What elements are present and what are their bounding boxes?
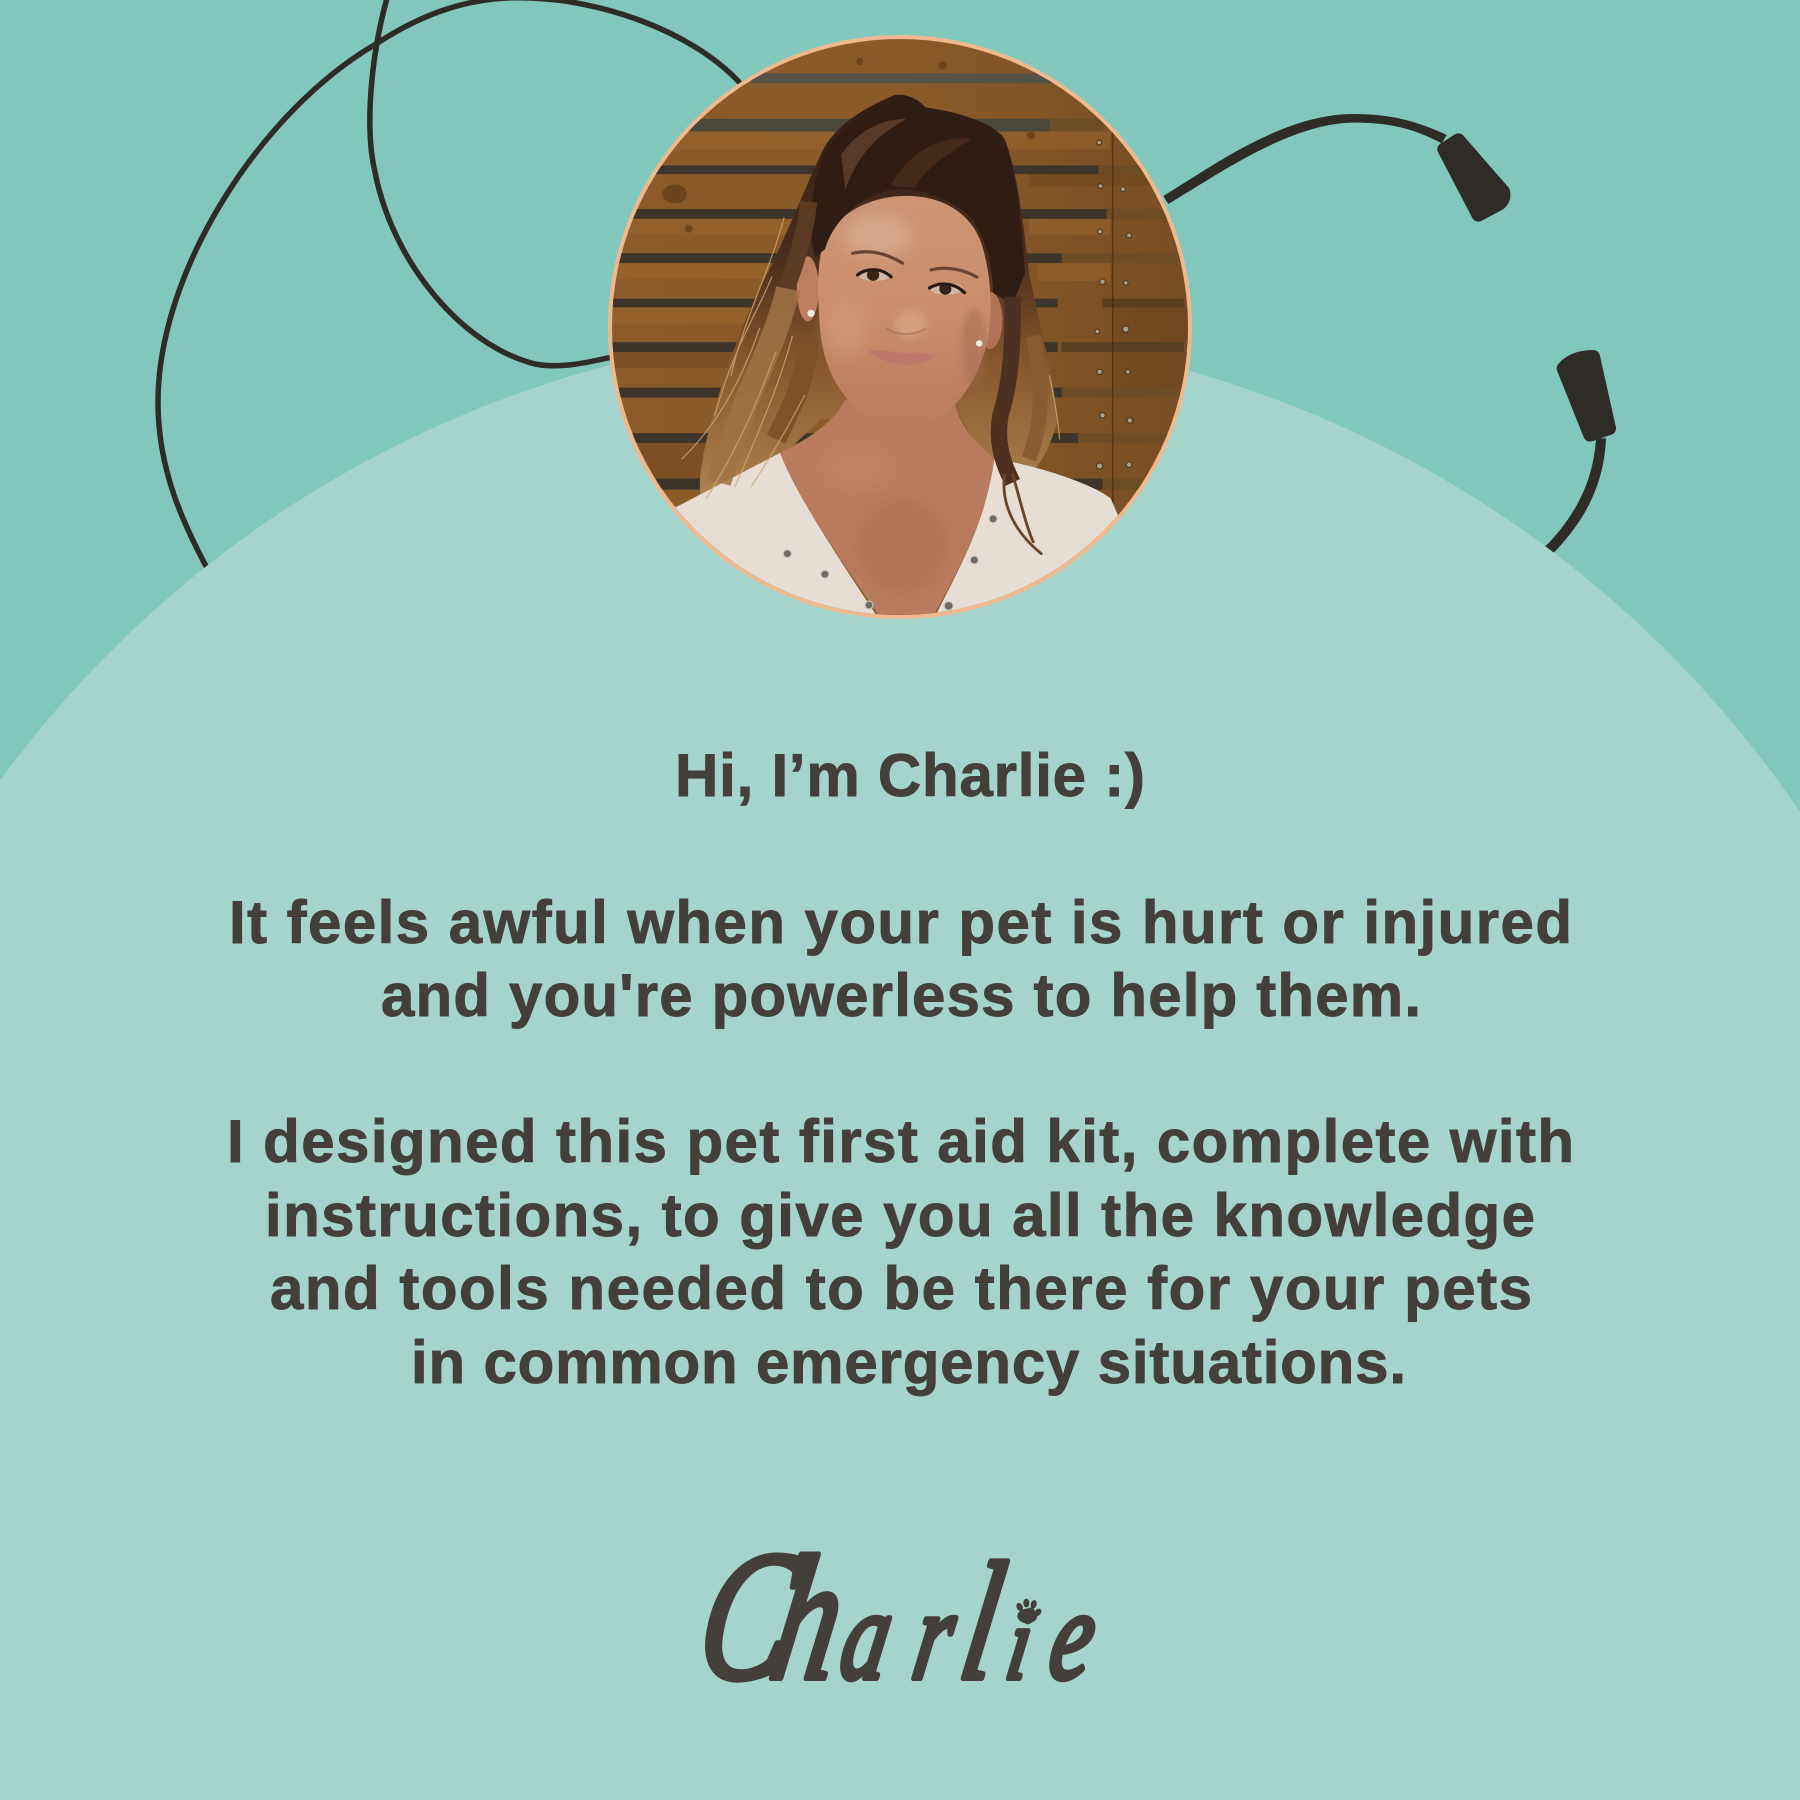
- signature: Charlie: h: [760, 1519, 858, 1717]
- portrait photo of Charlie: [608, 35, 1192, 619]
- eyebrows: [853, 252, 977, 277]
- shirt buttons: [783, 515, 997, 610]
- face: [818, 196, 991, 424]
- signature: Charlie: a: [832, 1566, 903, 1706]
- paragraph: first aid kit: in common emergency situations.: [411, 1329, 1406, 1396]
- eyes: [858, 269, 965, 295]
- back hair: [700, 95, 1058, 495]
- paragraph: first aid kit: [227, 1108, 1574, 1396]
- signature: Charlie: C: [686, 1514, 813, 1719]
- paragraph: first aid kit: I designed this pet first aid kit, complete with: [227, 1108, 1574, 1175]
- lips: [868, 350, 935, 365]
- signature: Charlie: [686, 1514, 1115, 1719]
- shirt: [676, 453, 1118, 614]
- nose shadow: [887, 328, 925, 334]
- top hair over forehead: [811, 105, 1025, 305]
- icon: paw print: [1015, 1599, 1043, 1623]
- ears: [797, 256, 819, 321]
- signature: Charlie: i: [1000, 1588, 1040, 1701]
- paragraph: first aid kit: instructions, to give you all the knowledge: [265, 1182, 1535, 1249]
- signature: Charlie: r: [905, 1566, 966, 1706]
- wood fence: [612, 39, 1188, 615]
- looping stethoscope tube on the left: [158, 0, 739, 600]
- paragraph: it feels awful: and you're powerless to help them.: [381, 962, 1421, 1029]
- earrings: [807, 310, 982, 347]
- heading: greeting: Hi, I’m Charlie :): [675, 742, 1145, 809]
- signature: Charlie: e: [1041, 1566, 1106, 1706]
- photo ring: [608, 35, 1192, 619]
- neck and chest: [780, 399, 994, 617]
- paragraph: it feels awful: It feels awful when your pet is hurt or injured: [229, 889, 1572, 956]
- screws: [1095, 140, 1133, 469]
- paragraph: it feels awful: [229, 889, 1572, 1029]
- stethoscope earpieces on the right: [1163, 114, 1609, 557]
- signature: Charlie: l: [950, 1528, 1016, 1714]
- front hair strands: [682, 202, 1060, 554]
- paragraph: first aid kit: and tools needed to be there for your pets: [270, 1255, 1532, 1322]
